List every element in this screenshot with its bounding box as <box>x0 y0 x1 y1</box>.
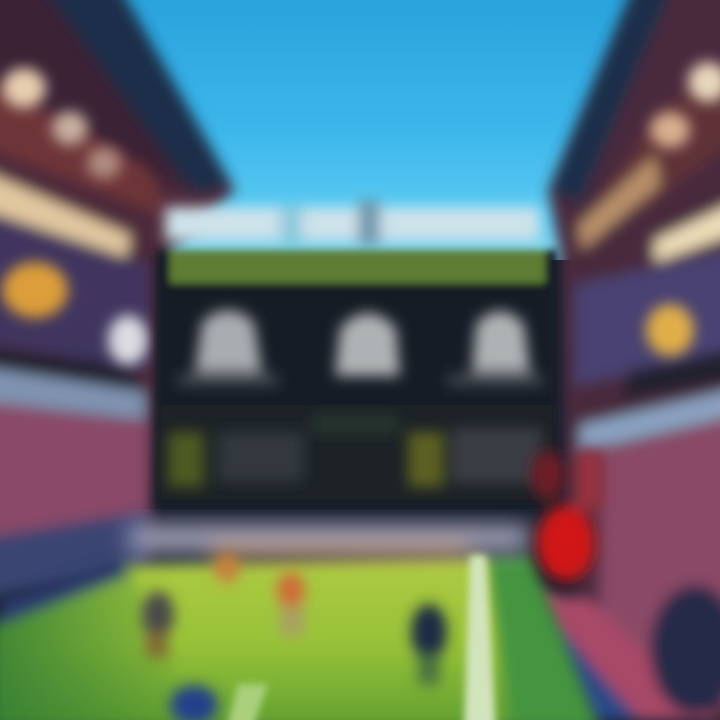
white banner above scoreboard <box>165 200 540 245</box>
players <box>142 553 447 720</box>
scoreboard <box>155 250 557 508</box>
right stand <box>530 0 720 720</box>
left stand <box>0 0 235 600</box>
goal line <box>226 555 496 720</box>
crowd strip <box>130 525 530 557</box>
stand lights <box>2 62 720 365</box>
scoreboard panels <box>168 310 543 487</box>
red flag <box>531 450 603 581</box>
sky <box>0 0 720 260</box>
pitch <box>0 555 600 720</box>
scoreboard green strip <box>170 250 545 283</box>
